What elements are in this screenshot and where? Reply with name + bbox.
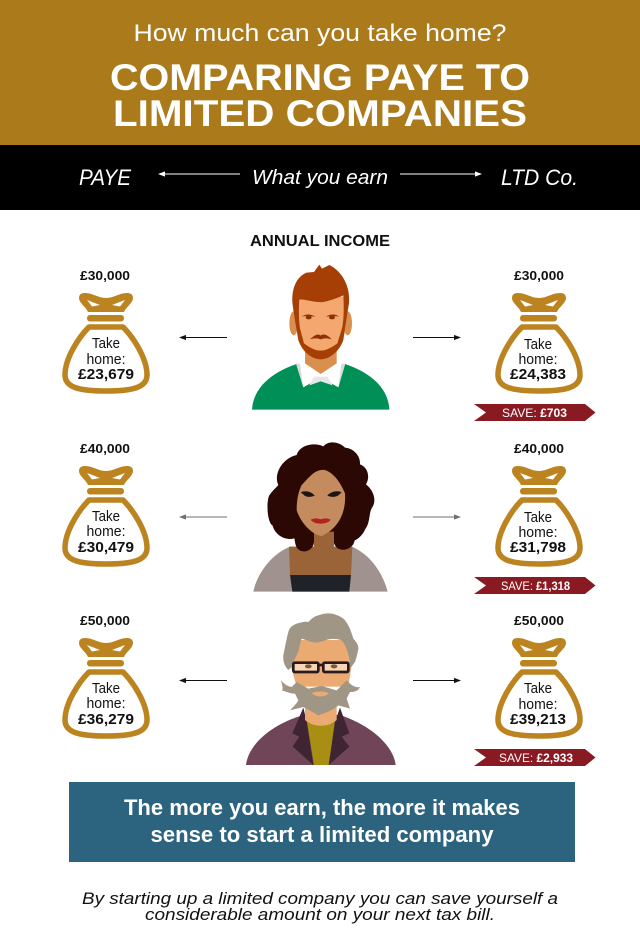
save ribbon 703: SAVE: £703 — [502, 406, 567, 420]
person: bearded man with glasses — [246, 613, 396, 765]
callout panel — [69, 782, 575, 862]
row: 40,000 PAYE bag — [65, 441, 147, 564]
label: LTD Co.: LTD Co. — [501, 165, 578, 190]
row: 50,000 LTD bag: £50,000 — [514, 613, 564, 628]
person: red-haired man — [252, 265, 389, 410]
label: PAYE: PAYE — [79, 165, 131, 190]
save ribbon 703 — [474, 404, 596, 421]
row: 30,000 LTD bag: £30,000 — [514, 268, 564, 283]
row: 40,000 PAYE bag: home: — [86, 523, 126, 540]
row: 30,000 LTD bag: £24,383 — [510, 366, 566, 383]
arrow: to PAYE 30k — [179, 335, 227, 340]
arrow: to LTD 30k — [413, 335, 461, 340]
row: 40,000 LTD bag: £31,798 — [510, 539, 566, 556]
row: 50,000 LTD bag: home: — [518, 696, 558, 713]
arrow: to PAYE 50k — [179, 678, 227, 683]
arrow: right — [400, 171, 482, 177]
callout text: sense to start a limited company — [150, 822, 494, 847]
person: woman with curly hair — [253, 442, 388, 592]
arrow: left — [158, 171, 240, 177]
row: 50,000 LTD bag: Take — [524, 680, 552, 697]
row: 40,000 LTD bag: Take — [524, 509, 552, 526]
row: 50,000 PAYE bag: home: — [86, 695, 126, 712]
row: 40,000 PAYE bag: £40,000 — [80, 441, 130, 456]
row: 40,000 LTD bag: £40,000 — [514, 441, 564, 456]
save ribbon 2,933 — [474, 749, 596, 766]
row: 30,000 PAYE bag: Take — [92, 335, 120, 352]
comparison bar — [0, 145, 640, 210]
save ribbon 1,318 — [474, 577, 596, 594]
row: 40,000 PAYE bag: Take — [92, 508, 120, 525]
row: 50,000 LTD bag — [498, 613, 580, 736]
footer text: By starting up a limited company you can save yourself a — [82, 889, 558, 908]
label: what you earn: What you earn — [252, 167, 388, 189]
row: 30,000 PAYE bag: £30,000 — [80, 268, 130, 283]
row: 50,000 PAYE bag: £36,279 — [78, 711, 134, 728]
save ribbon 2,933: SAVE: £2,933 — [499, 751, 573, 765]
arrow: to LTD 40k — [413, 514, 461, 520]
row: 40,000 PAYE bag: £30,479 — [78, 539, 134, 556]
row: 30,000 PAYE bag: home: — [86, 351, 126, 368]
subtitle: How much can you take home? — [134, 20, 506, 47]
row: 30,000 PAYE bag: £23,679 — [78, 366, 134, 383]
row: 40,000 LTD bag: home: — [518, 524, 558, 541]
footer text: considerable amount on your next tax bill. — [145, 905, 495, 924]
row: 50,000 LTD bag: £39,213 — [510, 711, 566, 728]
row: 50,000 PAYE bag: £50,000 — [80, 613, 130, 628]
title: LIMITED COMPANIES — [113, 93, 527, 134]
header panel — [0, 0, 640, 145]
row: 40,000 LTD bag — [498, 441, 580, 564]
row: 50,000 PAYE bag: Take — [92, 680, 120, 697]
title: COMPARING PAYE TO — [110, 57, 530, 98]
row: 30,000 LTD bag: home: — [518, 351, 558, 368]
arrow: to PAYE 40k — [179, 514, 227, 520]
row: 50,000 PAYE bag — [65, 613, 147, 736]
row: 30,000 LTD bag — [498, 268, 580, 391]
save ribbon 1,318: SAVE: £1,318 — [501, 579, 570, 593]
row: 30,000 LTD bag: Take — [524, 336, 552, 353]
heading: annual income: ANNUAL INCOME — [250, 233, 390, 250]
arrow: to LTD 50k — [413, 678, 461, 683]
callout text: The more you earn, the more it makes — [124, 795, 520, 820]
row: 30,000 PAYE bag — [65, 268, 147, 391]
